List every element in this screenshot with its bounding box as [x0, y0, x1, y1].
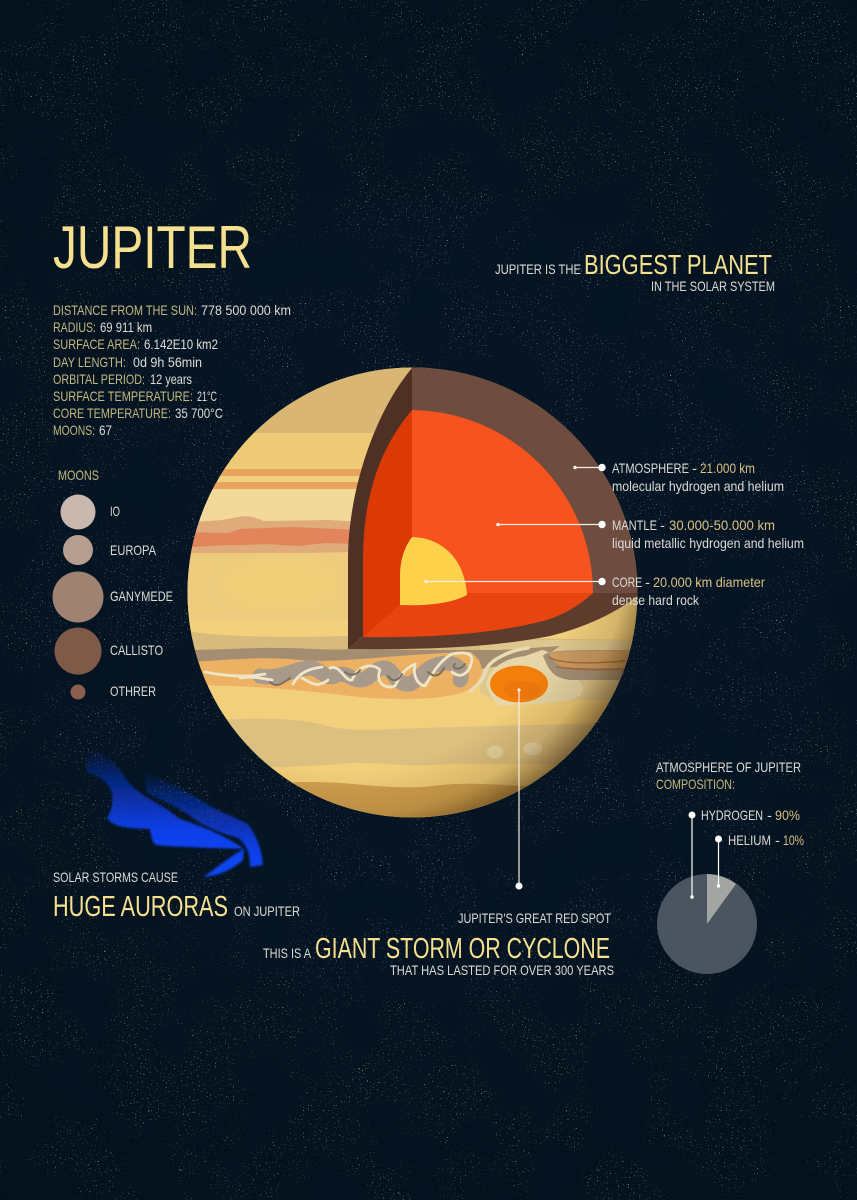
- callout: core: -: [645, 574, 650, 590]
- text block: planet facts: RADIUS:: [53, 319, 96, 335]
- illustration: Jupiter planet with cutaway: [180, 360, 650, 830]
- callout: biggest planet: [495, 249, 775, 294]
- callout: auroras: [53, 869, 300, 923]
- illustration: blue aurora: [87, 748, 263, 877]
- label: hydrogen: HYDROGEN: [701, 807, 763, 823]
- callout: mantle: -: [660, 517, 665, 533]
- moon: Callisto: [54, 628, 163, 674]
- callout: mantle: liquid metallic hydrogen and helium: [612, 535, 804, 551]
- callout: great red spot: JUPITER'S GREAT RED SPOT: [458, 910, 611, 926]
- great red spot: [486, 650, 583, 706]
- callout: atmosphere: molecular hydrogen and helium: [612, 478, 784, 494]
- callout: great red spot: GIANT STORM OR CYCLONE: [315, 933, 610, 965]
- text block: planet facts: SURFACE TEMPERATURE:: [53, 388, 193, 404]
- title: JUPITER: [53, 214, 252, 281]
- moon: Callisto: CALLISTO: [110, 642, 163, 658]
- moon: other: OTHRER: [110, 683, 156, 699]
- text block: planet facts: 67: [99, 422, 112, 438]
- text block: planet facts: [53, 302, 291, 438]
- callout: atmosphere: ATMOSPHERE: [612, 460, 689, 476]
- callout: atmosphere: -: [692, 460, 697, 476]
- callout: biggest planet: IN THE SOLAR SYSTEM: [651, 278, 775, 294]
- text block: planet facts: DAY LENGTH:: [53, 354, 126, 370]
- heading: atmosphere composition: ATMOSPHERE OF JUPITER: [656, 759, 801, 775]
- callout: core: [424, 574, 765, 608]
- moon: other: [70, 683, 156, 700]
- moon: Io: IO: [110, 503, 120, 519]
- callout: great red spot: [263, 910, 614, 978]
- pie chart: atmosphere composition: [657, 807, 804, 974]
- callout: mantle: MANTLE: [612, 517, 657, 533]
- moon: Ganymede: [52, 572, 173, 622]
- text block: planet facts: SURFACE AREA:: [53, 336, 140, 352]
- planet surface bands: [180, 360, 650, 830]
- moons heading: MOONS: [58, 467, 99, 483]
- moon: Ganymede: GANYMEDE: [110, 588, 173, 604]
- text block: planet facts: ORBITAL PERIOD:: [53, 371, 145, 387]
- callout: auroras: ON JUPITER: [234, 903, 300, 919]
- callout: biggest planet: BIGGEST PLANET: [584, 249, 772, 280]
- cutaway: mantle: [363, 410, 593, 637]
- heading: atmosphere composition: [656, 759, 801, 792]
- cutaway: core: [400, 537, 467, 605]
- text block: planet facts: DISTANCE FROM THE SUN:: [53, 302, 197, 318]
- panel: moons: [52, 467, 173, 700]
- heading: atmosphere composition: COMPOSITION:: [656, 776, 735, 792]
- label: helium: 10%: [783, 832, 804, 848]
- text block: planet facts: 6.142E10 km2: [144, 336, 218, 352]
- white ovals: [487, 746, 503, 758]
- text block: planet facts: 35 700°C: [175, 405, 223, 421]
- moon: Europa: [63, 535, 157, 565]
- text block: planet facts: 69 911 km: [100, 319, 152, 335]
- text block: planet facts: 0d 9h 56min: [133, 354, 202, 370]
- text block: planet facts: 778 500 000 km: [201, 302, 291, 318]
- text block: planet facts: 12 years: [150, 371, 192, 387]
- callout: atmosphere: 21.000 km: [700, 460, 755, 476]
- text block: planet facts: CORE TEMPERATURE:: [53, 405, 171, 421]
- callout: core: CORE: [612, 574, 642, 590]
- callout: auroras: SOLAR STORMS CAUSE: [53, 869, 178, 885]
- cutaway: crust: [348, 367, 650, 649]
- label: helium: [715, 832, 804, 888]
- callout: mantle: 30.000-50.000 km: [669, 517, 775, 533]
- moon: Io: [60, 494, 120, 530]
- callout: core: dense hard rock: [612, 592, 700, 608]
- callout: atmosphere: [573, 460, 784, 494]
- label: helium: HELIUM: [728, 832, 771, 848]
- storm swirls: [205, 648, 528, 692]
- text block: planet facts: MOONS:: [53, 422, 95, 438]
- leader line: great red spot: [516, 688, 522, 890]
- callout: great red spot: THAT HAS LASTED FOR OVER 300 YEARS: [390, 962, 614, 978]
- callout: core: 20.000 km diameter: [653, 574, 765, 590]
- callout: biggest planet: JUPITER IS THE: [495, 261, 581, 277]
- callout: auroras: HUGE AURORAS: [53, 891, 228, 923]
- label: hydrogen: [688, 807, 800, 899]
- label: helium: -: [775, 832, 780, 848]
- text block: planet facts: 21°C: [197, 388, 217, 404]
- callout: mantle: [496, 517, 804, 551]
- label: hydrogen: 90%: [775, 807, 800, 823]
- label: hydrogen: -: [767, 807, 772, 823]
- right cloud box: [543, 650, 630, 680]
- moon: Europa: EUROPA: [110, 542, 157, 558]
- callout: great red spot: THIS IS A: [263, 945, 312, 961]
